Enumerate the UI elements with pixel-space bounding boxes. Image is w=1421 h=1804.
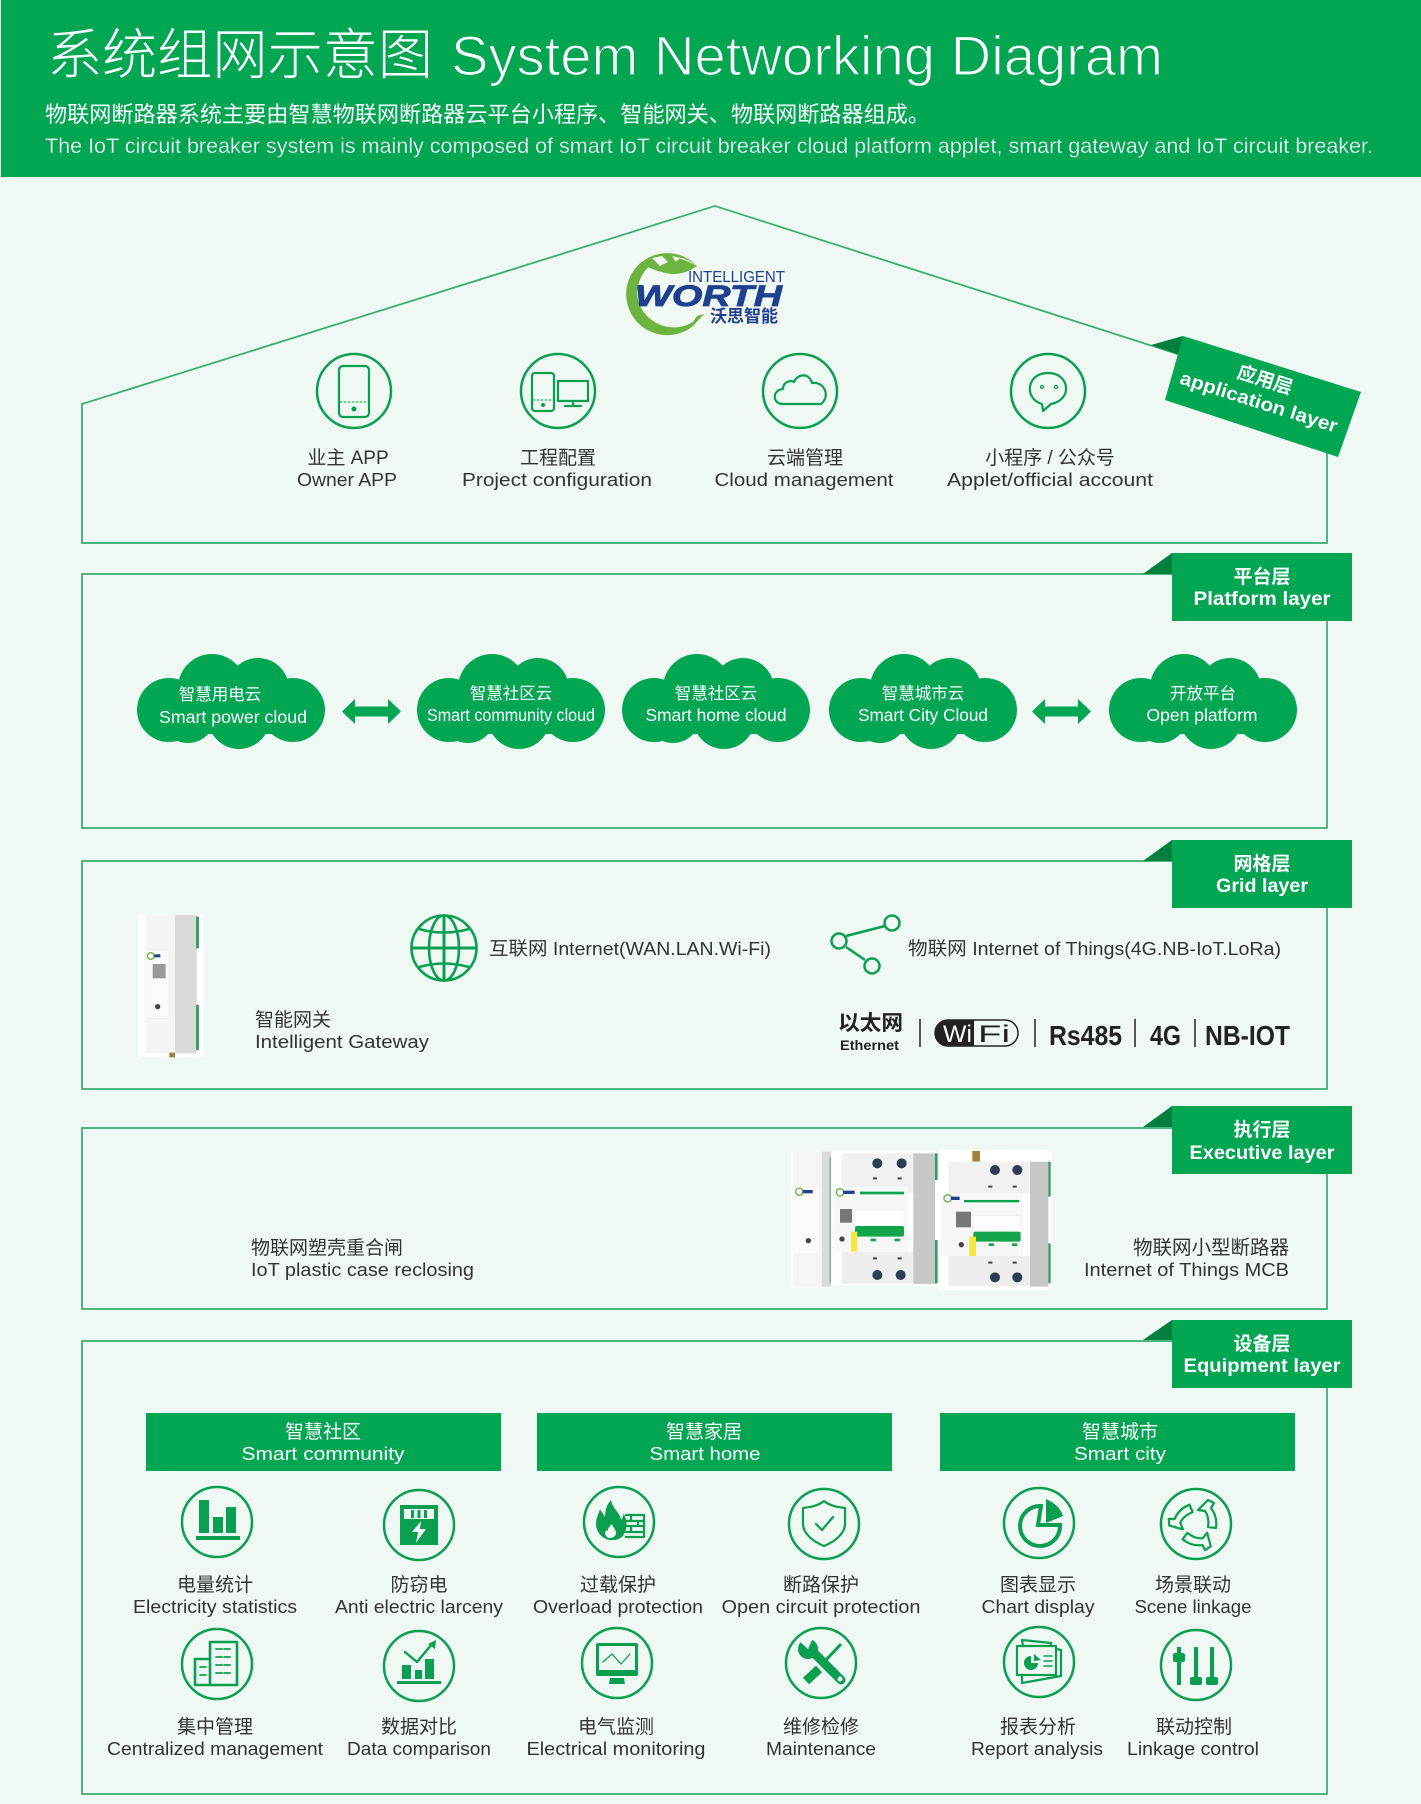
icon: report xyxy=(1004,1627,1074,1697)
panel: grid layer xyxy=(82,840,1352,1089)
label: overload protection: 过载保护 xyxy=(580,1574,656,1596)
label: open circuit protection: 断路保护 xyxy=(783,1574,859,1596)
breaker devices xyxy=(791,1150,1052,1290)
label: overload protection: Overload protection xyxy=(533,1596,703,1617)
label: linkage control: Linkage control xyxy=(1127,1738,1259,1759)
cloud: smart power: 智慧用电云 xyxy=(179,685,261,704)
label: anti electric larceny: 防窃电 xyxy=(390,1574,448,1596)
icon: globe xyxy=(412,916,476,980)
label: plastic case reclosing: IoT plastic case reclosing xyxy=(251,1259,474,1280)
heading: smart city: 智慧城市 xyxy=(1082,1421,1158,1443)
heading: smart home xyxy=(537,1413,892,1471)
label: internet of things: 物联网 Internet of Things(4G.NB-IoT.LoRa) xyxy=(908,938,1281,959)
label: maintenance xyxy=(766,1716,876,1759)
cloud: smart power xyxy=(137,654,325,749)
cloud: open platform: 开放平台 xyxy=(1170,684,1236,703)
heading: smart community: Smart community xyxy=(242,1443,405,1464)
label: data comparison: 数据对比 xyxy=(381,1716,457,1738)
label: plastic case reclosing xyxy=(251,1237,474,1280)
label: iot mcb: 物联网小型断路器 xyxy=(1133,1237,1289,1259)
icon: cloud management xyxy=(763,354,837,428)
label: electrical monitoring: 电气监测 xyxy=(578,1716,654,1738)
label: anti electric larceny: Anti electric larceny xyxy=(335,1596,504,1617)
tag: platform layer xyxy=(1143,553,1352,621)
cloud: open platform: Open platform xyxy=(1146,705,1258,725)
icon: monitor xyxy=(582,1628,652,1698)
label: centralized management: 集中管理 xyxy=(177,1716,253,1738)
label: report analysis: Report analysis xyxy=(971,1738,1103,1759)
cloud: smart home: Smart home cloud xyxy=(646,705,786,725)
label: applet: Applet/official account xyxy=(947,469,1153,490)
label: intelligent gateway: 智能网关 xyxy=(255,1009,331,1031)
tag: platform layer: Platform layer xyxy=(1194,589,1331,610)
cloud: smart power: Smart power cloud xyxy=(159,707,307,727)
tag: executive layer: Executive layer xyxy=(1190,1143,1335,1164)
label: scene linkage: 场景联动 xyxy=(1155,1574,1231,1596)
cloud: smart community xyxy=(417,654,605,749)
label: intelligent gateway xyxy=(255,1009,430,1052)
logo: INTELLIGENT xyxy=(688,269,785,286)
device: breaker two xyxy=(938,1150,1052,1290)
subtitle xyxy=(45,102,1373,158)
label: plastic case reclosing: 物联网塑壳重合闸 xyxy=(251,1237,403,1259)
panel: application layer xyxy=(82,206,1361,543)
tag: equipment layer: 设备层 xyxy=(1233,1333,1291,1355)
icon: buildings xyxy=(182,1629,252,1699)
label: electricity statistics xyxy=(133,1574,297,1617)
label: iot mcb xyxy=(1084,1237,1289,1280)
label: electricity statistics: Electricity statistics xyxy=(133,1596,297,1617)
heading: smart community xyxy=(146,1413,501,1471)
label: project configuration xyxy=(462,447,652,490)
subtitle: 物联网断路器系统主要由智慧物联网断路器云平台小程序、智能网关、物联网断路器组成。 xyxy=(45,102,930,127)
gateway device xyxy=(138,914,203,1057)
ribbon: application layer xyxy=(1151,336,1361,457)
label: internet: 互联网 Internet(WAN.LAN.Wi-Fi) xyxy=(489,938,771,959)
ethernet xyxy=(838,1012,903,1053)
icon: pie chart xyxy=(1004,1488,1074,1558)
cloud: smart city xyxy=(829,654,1017,749)
label: linkage control: 联动控制 xyxy=(1156,1716,1232,1738)
icon: maintenance tools xyxy=(786,1628,856,1698)
label: electrical monitoring xyxy=(526,1716,706,1759)
label: report analysis: 报表分析 xyxy=(1000,1716,1076,1738)
label: project configuration: 工程配置 xyxy=(520,447,596,469)
label: scene linkage xyxy=(1134,1574,1252,1617)
rs485: Rs485 xyxy=(1049,1020,1122,1051)
protocols row xyxy=(838,1012,1290,1053)
label: chart display: Chart display xyxy=(982,1596,1095,1617)
icon: fire and wall xyxy=(584,1487,654,1557)
label: centralized management: Centralized management xyxy=(107,1738,323,1759)
arrow: double-headed right xyxy=(1032,699,1091,724)
wifi logo: Fi xyxy=(978,1021,1010,1048)
ethernet: Ethernet xyxy=(840,1038,900,1053)
ribbon: application layer: 应用层 xyxy=(1234,360,1296,399)
icon: share nodes xyxy=(832,916,900,974)
label: owner app: 业主 APP xyxy=(307,447,389,469)
label: open circuit protection: Open circuit protection xyxy=(722,1596,920,1617)
tag: executive layer xyxy=(1143,1106,1352,1174)
ribbon: application layer: application layer xyxy=(1177,368,1341,438)
icon: applet chat bubble xyxy=(1011,354,1085,428)
panel: equipment layer xyxy=(82,1320,1352,1794)
heading: smart community: 智慧社区 xyxy=(285,1421,361,1443)
cloud: smart community: 智慧社区云 xyxy=(470,684,552,703)
icon: data comparison xyxy=(384,1631,454,1701)
icon: owner app phone xyxy=(317,354,391,428)
label: maintenance: Maintenance xyxy=(766,1738,876,1759)
header banner xyxy=(1,0,1421,177)
tag: grid layer: 网格层 xyxy=(1233,853,1291,875)
cloud: smart home xyxy=(622,654,810,749)
icon: project configuration devices xyxy=(521,354,595,428)
device: breaker one xyxy=(832,1152,938,1286)
label: owner app: Owner APP xyxy=(297,469,397,490)
tag: grid layer xyxy=(1143,840,1352,908)
tag: equipment layer xyxy=(1143,1320,1352,1388)
icon: bar chart xyxy=(182,1487,252,1557)
arrow: double-headed xyxy=(342,699,401,724)
cloud: smart city: Smart City Cloud xyxy=(858,705,988,725)
subtitle: The IoT circuit breaker system is mainly composed of smart IoT circuit breaker cloud platform applet, smart gateway and IoT circuit breaker. xyxy=(45,135,1373,158)
cloud: smart city: 智慧城市云 xyxy=(882,684,964,703)
title: 系统组网示意图 xyxy=(47,24,433,86)
wifi logo: Wi xyxy=(943,1021,972,1048)
label: data comparison: Data comparison xyxy=(347,1738,491,1759)
label: intelligent gateway: Intelligent Gateway xyxy=(255,1031,430,1052)
cloud: open platform xyxy=(1109,654,1297,749)
panel: platform layer xyxy=(82,553,1352,828)
heading: smart city: Smart city xyxy=(1074,1443,1167,1464)
label: project configuration: Project configuration xyxy=(462,469,652,490)
label: data comparison xyxy=(347,1716,491,1759)
label: iot mcb: Internet of Things MCB xyxy=(1084,1259,1289,1280)
tag: platform layer: 平台层 xyxy=(1233,565,1291,588)
house outline xyxy=(82,206,1327,543)
label: open circuit protection xyxy=(722,1574,920,1617)
heading: smart home: Smart home xyxy=(650,1443,760,1464)
label: applet xyxy=(947,447,1153,490)
heading: smart city xyxy=(940,1413,1295,1471)
label: applet: 小程序 / 公众号 xyxy=(985,447,1115,469)
panel: executive layer xyxy=(82,1106,1352,1309)
tag: grid layer: Grid layer xyxy=(1216,876,1309,897)
label: linkage control xyxy=(1127,1716,1259,1759)
cloud: smart community: Smart community cloud xyxy=(427,705,595,725)
label: centralized management xyxy=(107,1716,323,1759)
label: overload protection xyxy=(533,1574,703,1617)
device: gateway module xyxy=(791,1152,832,1288)
tag: equipment layer: Equipment layer xyxy=(1184,1356,1341,1377)
tag: executive layer: 执行层 xyxy=(1233,1119,1291,1141)
logo: WORTH xyxy=(635,280,784,313)
title: System Networking Diagram xyxy=(451,24,1163,87)
heading: smart home: 智慧家居 xyxy=(666,1421,742,1443)
label: maintenance: 维修检修 xyxy=(783,1716,859,1738)
wifi logo xyxy=(935,1020,1018,1048)
icon: sliders xyxy=(1161,1630,1231,1700)
4g: 4G xyxy=(1150,1020,1181,1051)
label: chart display xyxy=(982,1574,1095,1617)
logo: 沃思智能 xyxy=(710,306,778,326)
cloud: smart home: 智慧社区云 xyxy=(675,684,757,703)
ethernet: 以太网 xyxy=(838,1012,903,1035)
label: electrical monitoring: Electrical monitoring xyxy=(526,1738,706,1759)
label: chart display: 图表显示 xyxy=(1000,1574,1076,1596)
label: cloud management: Cloud management xyxy=(714,469,894,490)
label: scene linkage: Scene linkage xyxy=(1134,1596,1252,1617)
label: report analysis xyxy=(971,1716,1103,1759)
icon: electric meter xyxy=(384,1490,454,1560)
label: owner app xyxy=(297,447,397,490)
title xyxy=(47,24,1163,87)
nb-iot: NB-IOT xyxy=(1205,1020,1290,1051)
label: cloud management xyxy=(714,447,894,490)
icon: shield xyxy=(789,1489,859,1559)
logo xyxy=(626,253,785,335)
label: cloud management: 云端管理 xyxy=(767,447,843,469)
label: electricity statistics: 电量统计 xyxy=(177,1574,253,1596)
label: anti electric larceny xyxy=(335,1574,504,1617)
icon: scene linkage arrows xyxy=(1161,1489,1231,1559)
